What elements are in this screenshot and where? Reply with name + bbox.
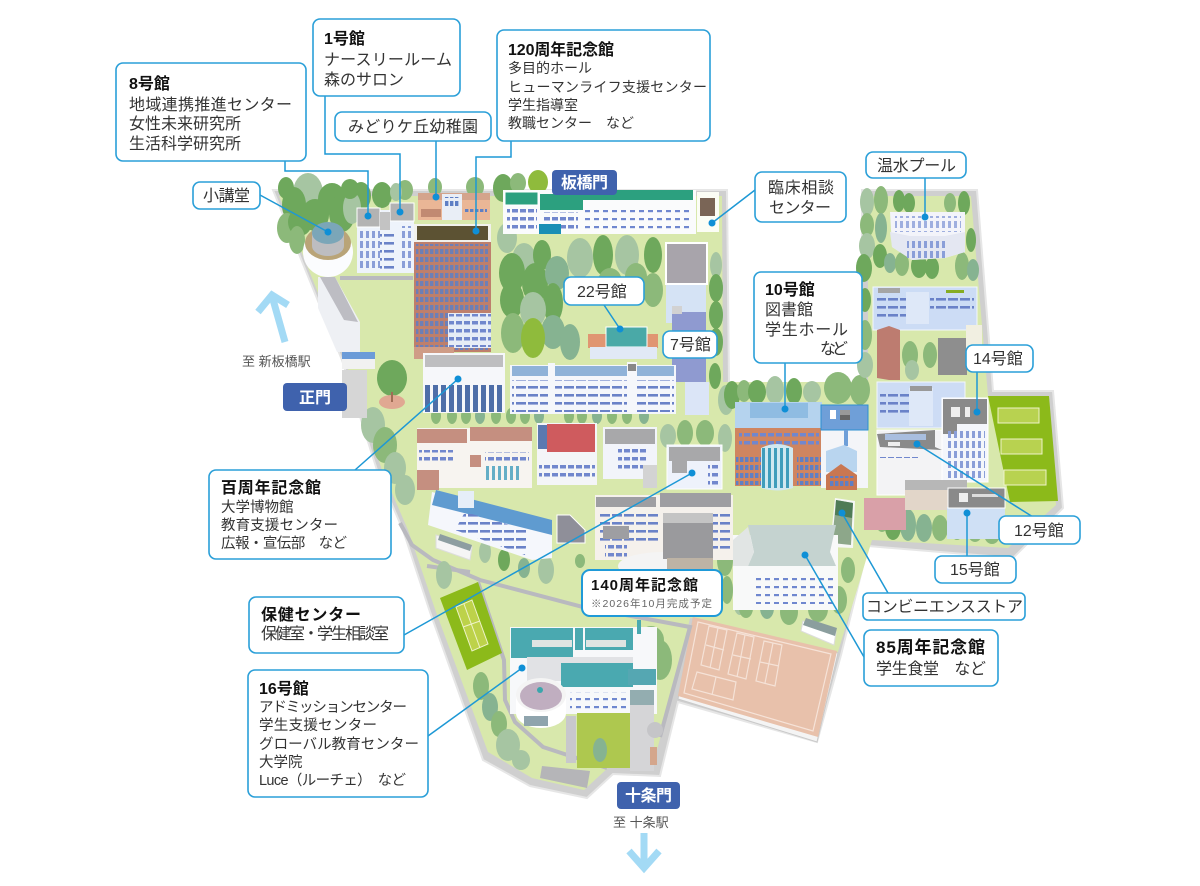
label: 温水プール: 温水プール (877, 157, 956, 175)
label: 臨床相談センター: 臨床相談 (768, 179, 834, 197)
label: 8号館: 地域連携推進センター (129, 96, 292, 114)
building: 22号館 (588, 327, 658, 359)
building: 16号館 (510, 620, 657, 728)
label: 16号館: 学生支援センター (259, 717, 377, 734)
building: clinical counselling centre (697, 192, 719, 232)
label: 小講堂: 小講堂 (203, 187, 250, 205)
gate: 十条門: 十条門 (625, 786, 672, 805)
label: 7号館: 7号館 (670, 336, 711, 354)
label: 10号館 (754, 272, 862, 363)
label: 1号館: ナースリールーム (324, 52, 452, 69)
label: 8号館: 女性未来研究所 (129, 115, 241, 133)
label: 120周年記念館: ヒューマンライフ支援センター (508, 79, 707, 95)
label: 8号館: 生活科学研究所 (129, 135, 241, 153)
label: 85周年記念館: 85周年記念館 (876, 637, 985, 657)
building: pool (890, 212, 965, 260)
label: コンビニエンスストア: コンビニエンスストア (866, 598, 1023, 616)
label: 臨床相談センター (755, 172, 846, 222)
label: 140周年記念館 (582, 570, 722, 616)
label: みどりケ丘幼稚園 (335, 112, 491, 141)
label: 温水プール (866, 152, 966, 178)
building: red roof block (537, 423, 597, 485)
label: 保健センター: 保健センター (261, 606, 361, 624)
label: 7号館 (663, 331, 717, 358)
label: 1号館 (313, 19, 460, 96)
label: 8号館: 8号館 (129, 75, 170, 93)
small building by field (801, 618, 837, 645)
label: 臨床相談センター: センター (769, 199, 831, 217)
building: long classroom wing (510, 362, 676, 414)
gate: 正門: 正門 (299, 389, 331, 407)
gate: 板橋門 (552, 170, 617, 195)
label: 10号館: など (820, 340, 848, 358)
building: 7号館 (666, 243, 709, 415)
label: 14号館 (966, 345, 1033, 372)
building: 板橋門 side (503, 190, 696, 234)
arrow: to 十条駅 (629, 833, 659, 868)
label: みどりケ丘幼稚園: みどりケ丘幼稚園 (348, 118, 478, 136)
label: 85周年記念館: 学生食堂 など (876, 660, 986, 678)
label: 16号館: 大学院 (259, 754, 302, 771)
campus ground (273, 190, 1063, 798)
label: 16号館: Luce（ルーチェ） など (259, 772, 406, 789)
label: 16号館: 16号館 (259, 680, 309, 698)
label: 8号館 (116, 63, 306, 161)
leader lines and dots (260, 96, 1033, 736)
label: 10号館: 学生ホール (765, 321, 848, 339)
label: 至 新板橋駅: 至 新板橋駅 (242, 354, 311, 369)
label: 120周年記念館: 多目的ホール (508, 60, 592, 76)
building: 12号館 (877, 430, 942, 495)
building: 保健センター (667, 445, 722, 489)
label: 12号館 (999, 516, 1080, 544)
roads (340, 278, 690, 768)
building: central block and 140周年記念館 (595, 493, 733, 580)
label: 140周年記念館: ※2026年10月完成予定 (591, 597, 712, 610)
label: 12号館: 12号館 (1014, 522, 1064, 540)
label: 120周年記念館: 学生指導室 (508, 97, 578, 113)
building: 85周年記念館 (733, 525, 838, 610)
label: 1号館: 1号館 (324, 30, 365, 48)
building: 百周年記念館 (423, 353, 505, 413)
building: 8号館 and 1号館 (357, 203, 414, 273)
label: 至 十条駅: 至 十条駅 (613, 815, 669, 830)
label: 百周年記念館: 百周年記念館 (221, 478, 321, 497)
gate: 正門 (283, 383, 347, 411)
label: 10号館: 10号館 (765, 281, 815, 299)
south lawn and parking (540, 705, 663, 788)
label: 14号館: 14号館 (973, 350, 1023, 368)
label: 百周年記念館 (209, 470, 391, 559)
building: 15号館 (864, 480, 1005, 539)
label: 1号館: 森のサロン (324, 71, 404, 89)
label: 百周年記念館: 教育支援センター (221, 517, 338, 534)
building: 10号館 library (735, 402, 868, 490)
label: 120周年記念館: 教職センター など (508, 115, 634, 131)
building: brick block (417, 427, 532, 490)
label: 百周年記念館: 大学博物館 (221, 499, 294, 516)
label: 16号館: グローバル教育センター (259, 736, 419, 753)
building: 14号館 (942, 398, 988, 482)
building: kindergarten (418, 193, 490, 220)
trees (277, 170, 1000, 770)
label: 10号館: 図書館 (765, 301, 813, 319)
building: lecture hall (303, 222, 353, 277)
arrow: to 新板橋駅 (258, 295, 288, 342)
tennis court south (440, 582, 502, 670)
label: 15号館: 15号館 (950, 561, 1000, 579)
label: 16号館 (248, 670, 428, 797)
building: 120周年記念館 (414, 224, 491, 359)
label: 120周年記念館: 120周年記念館 (508, 40, 614, 59)
building: blue roof wing (428, 490, 585, 560)
label: 140周年記念館: 140周年記念館 (591, 576, 698, 594)
label: 120周年記念館 (497, 30, 710, 141)
label: 22号館 (564, 277, 644, 305)
label: 百周年記念館: 広報・宣伝部 など (221, 535, 348, 552)
building: east blocks (873, 287, 982, 428)
label: 16号館: アドミッションセンター (259, 699, 407, 716)
label: 小講堂 (193, 182, 260, 209)
gate: 十条門 (617, 782, 680, 809)
label: コンビニエンスストア (863, 593, 1025, 620)
label: 保健センター (249, 597, 404, 653)
label: 15号館 (935, 556, 1016, 583)
label: 22号館: 22号館 (577, 283, 627, 301)
gate: 板橋門: 板橋門 (561, 173, 608, 192)
building: west wing (318, 277, 375, 418)
label: 保健センター: 保健室・学生相談室 (261, 625, 389, 643)
tennis courts east (988, 396, 1058, 502)
building: grey roof block (603, 427, 657, 488)
building: convenience store (830, 498, 855, 548)
sports field (678, 617, 838, 742)
label: 85周年記念館 (864, 630, 998, 686)
